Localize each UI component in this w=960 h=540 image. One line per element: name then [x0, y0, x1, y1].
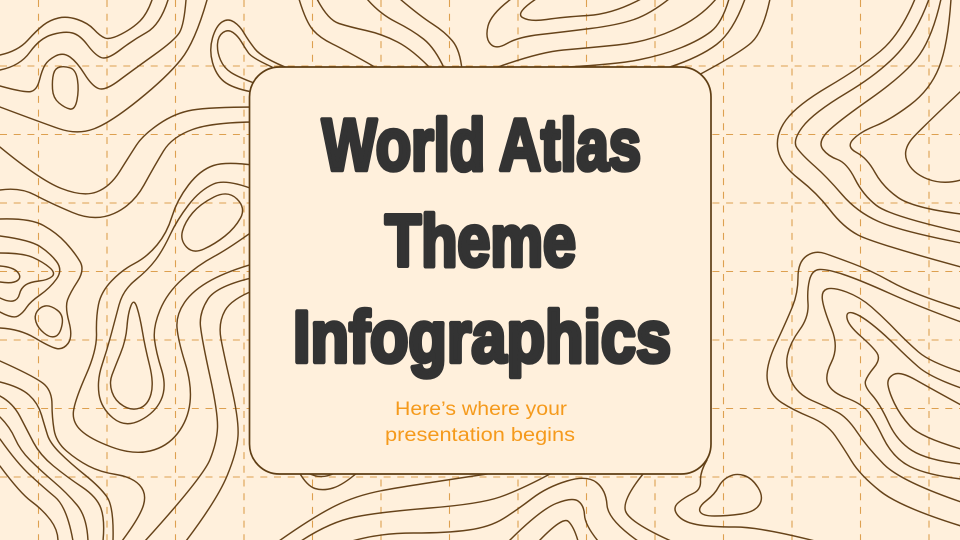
contours: middle left cluster	[0, 219, 82, 349]
title: Infographics	[293, 297, 671, 378]
central title panel	[250, 67, 711, 474]
subtitle: Here’s where your	[395, 399, 568, 420]
title: Theme	[385, 201, 576, 282]
subtitle: presentation begins	[385, 425, 575, 446]
contours: bottom left	[0, 361, 145, 540]
contours: top right	[777, 0, 960, 267]
contours: top centre	[299, 0, 770, 77]
title	[293, 105, 671, 378]
title: World Atlas	[322, 105, 641, 186]
panel card	[250, 67, 711, 474]
contours: bottom centre	[279, 460, 815, 540]
subtitle	[385, 399, 575, 446]
contours: bottom right	[700, 252, 960, 526]
contours: top left	[0, 0, 290, 218]
contours: teardrop peak beside panel	[73, 163, 260, 540]
